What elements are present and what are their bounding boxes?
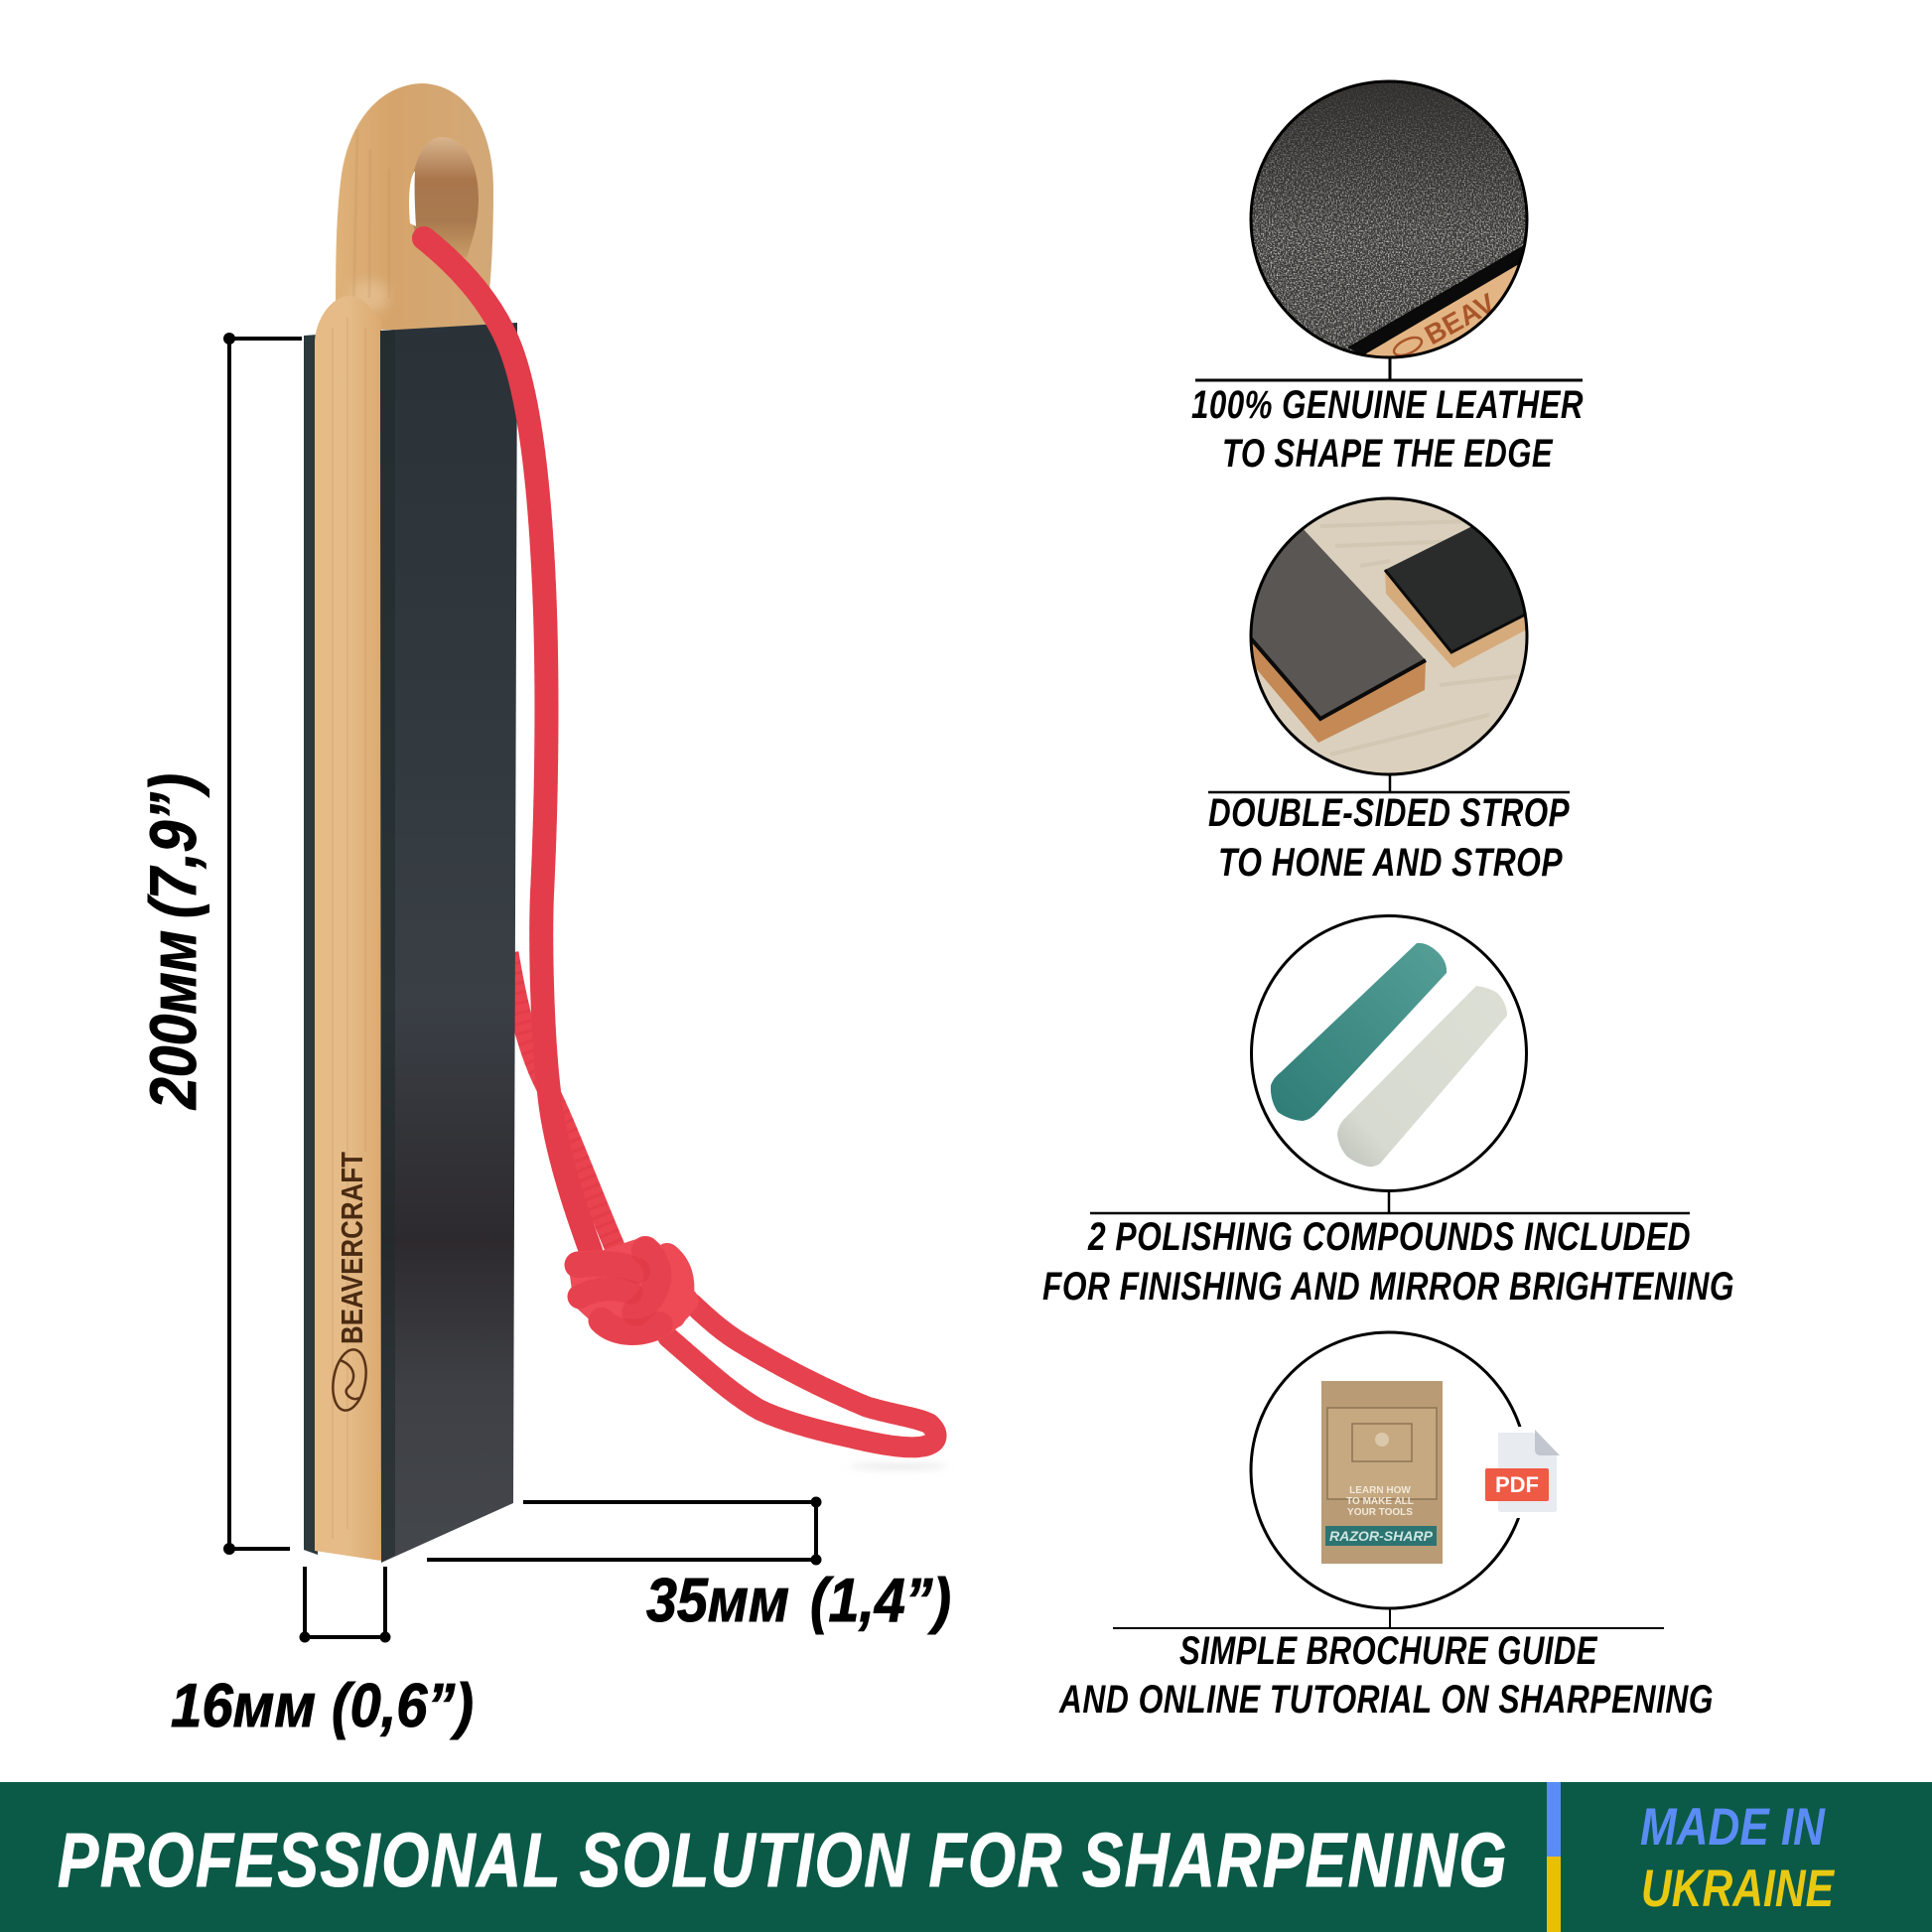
- rope knot: [568, 1236, 695, 1342]
- caption 4: AND ONLINE TUTORIAL ON SHARPENING: [1058, 1678, 1714, 1722]
- caption 3: [1042, 1215, 1734, 1309]
- feature 4: brochure and tutorial: [1058, 1332, 1714, 1722]
- caption 2: [1208, 791, 1570, 885]
- red rope: [424, 238, 936, 1448]
- icon: brochure: LEARN HOW: [1349, 1485, 1411, 1496]
- made in badge: UKRAINE: [1641, 1860, 1835, 1918]
- caption 4: SIMPLE BROCHURE GUIDE: [1179, 1629, 1598, 1673]
- caption 1: [1191, 383, 1584, 476]
- caption 3: FOR FINISHING AND MIRROR BRIGHTENING: [1042, 1265, 1734, 1309]
- height label: [136, 773, 209, 1111]
- engraved beaver logo: [329, 1347, 370, 1413]
- product: leather strop with wooden handle: [304, 83, 948, 1563]
- width label: [646, 1567, 951, 1635]
- caption 2: TO HONE AND STROP: [1218, 841, 1563, 885]
- dimension: height: [136, 333, 302, 1555]
- feature 2: double-sided strop: [1208, 496, 1570, 885]
- icon: brochure: YOUR TOOLS: [1347, 1507, 1413, 1518]
- engraved logo text: BEAVERCRAFT: [335, 1152, 369, 1344]
- made in badge: MADE IN: [1640, 1798, 1826, 1857]
- width label: (1,4”): [810, 1567, 951, 1635]
- Ukraine flag divider: [1547, 1782, 1561, 1932]
- rope loop: [668, 1304, 936, 1448]
- thickness label: [171, 1672, 474, 1740]
- width label: 35мм: [646, 1567, 789, 1635]
- icon: brochure: [1321, 1381, 1443, 1564]
- wooden base strip: [315, 296, 381, 1561]
- made in badge: [1640, 1798, 1835, 1918]
- thickness label: (0,6”): [332, 1672, 474, 1740]
- feature 3: polishing compounds: [1042, 915, 1734, 1309]
- icon: teal compound bar: [1271, 943, 1447, 1121]
- caption 3: 2 POLISHING COMPOUNDS INCLUDED: [1087, 1215, 1691, 1259]
- dimension: thickness: [171, 1567, 474, 1740]
- back leather layer: [304, 335, 318, 1555]
- icon: white compound bar: [1337, 986, 1507, 1167]
- bottom banner: [0, 1782, 1932, 1932]
- caption 4: [1058, 1629, 1714, 1722]
- icon: brochure: RAZOR-SHARP: [1329, 1528, 1434, 1544]
- icon: two strop blocks: [1249, 496, 1531, 778]
- feature 1: genuine leather: [1191, 79, 1584, 476]
- thickness label: 16мм: [171, 1672, 316, 1740]
- wooden hook handle: [336, 83, 493, 330]
- caption 1: TO SHAPE THE EDGE: [1222, 432, 1554, 476]
- icon: brochure: TO MAKE ALL: [1346, 1496, 1414, 1507]
- banner headline: PROFESSIONAL SOLUTION FOR SHARPENING: [58, 1818, 1508, 1903]
- front leather face: [380, 323, 517, 1563]
- icon: PDF file: PDF: [1495, 1472, 1539, 1497]
- height label: 200мм: [136, 930, 209, 1111]
- icon: leather close-up: BEAV: [1420, 287, 1500, 350]
- icon: PDF file: [1485, 1430, 1560, 1515]
- shadow under rope loop: [849, 1464, 948, 1468]
- caption 2: DOUBLE-SIDED STROP: [1208, 791, 1570, 835]
- height label: (7,9”): [136, 773, 209, 918]
- second rope strand behind leather: [508, 953, 616, 1249]
- icon: leather close-up: [1249, 79, 1531, 367]
- dimension: width: [427, 1497, 951, 1635]
- caption 1: 100% GENUINE LEATHER: [1191, 383, 1584, 427]
